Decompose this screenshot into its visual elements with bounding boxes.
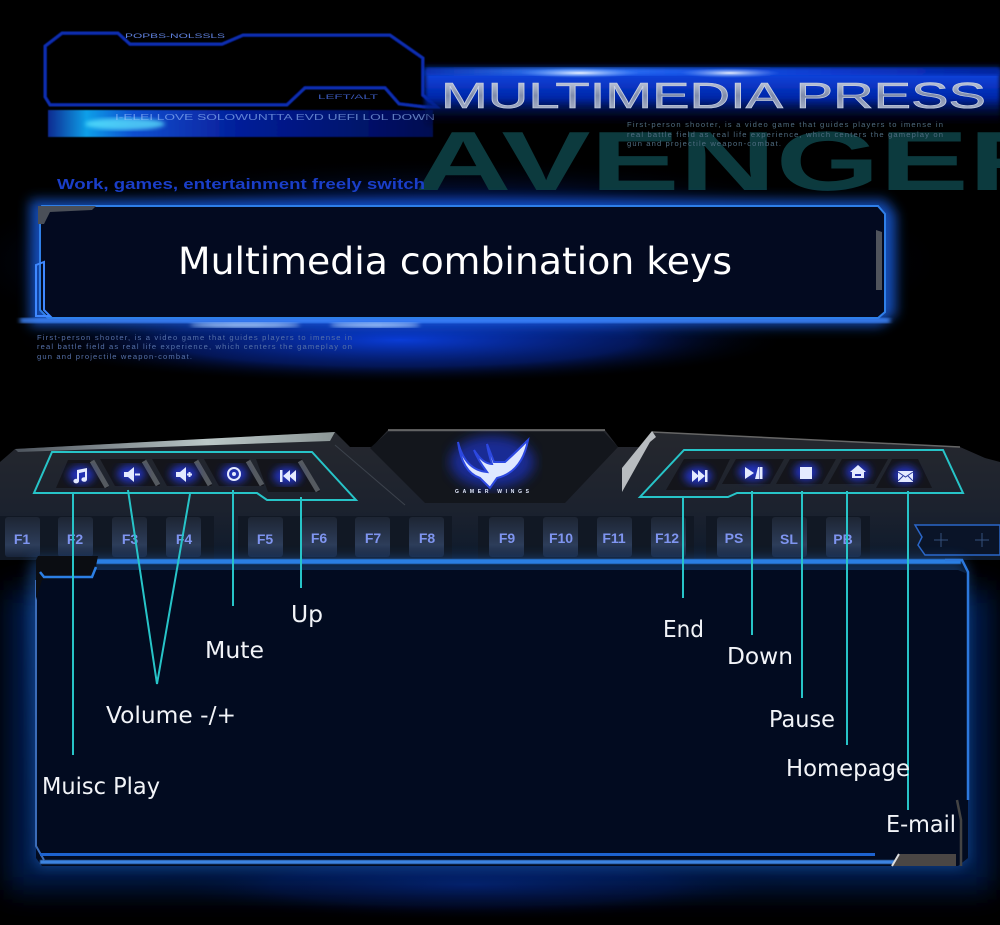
small caption: top right: First-person shooter, is a video game that guides players to imense in — [627, 120, 943, 129]
function key row: F8 — [419, 530, 435, 546]
small caption: top right: real battle field as real life experience, which centers the gameplay on — [627, 130, 943, 139]
small caption: under banner — [37, 333, 352, 361]
key labels: Muisc Play — [42, 774, 160, 800]
function key row: F9 — [499, 530, 515, 546]
key labels: Volume -/+ — [106, 703, 236, 729]
keyboard body — [0, 430, 1000, 560]
small caption: under banner: gun and projectile weapon-combat. — [37, 352, 192, 361]
icon: volume down — [124, 467, 140, 482]
key labels: Homepage — [786, 756, 910, 782]
function key row: F2 — [67, 531, 83, 547]
header frame: LEFT/ALT — [318, 95, 379, 101]
function key row: PB — [833, 531, 853, 547]
key labels: Mute — [205, 638, 264, 664]
icon: home — [850, 465, 866, 478]
icon: stop — [800, 467, 812, 479]
key labels: E-mail — [886, 812, 956, 838]
panel: lower frame — [28, 556, 969, 868]
icon: play pause — [745, 467, 762, 479]
function key row: F11 — [602, 530, 626, 546]
function key row: F5 — [257, 531, 273, 547]
logo emblem: GAMER WINGS — [455, 489, 530, 495]
icon: next track — [692, 470, 708, 482]
header streak: blue light band: I-ELEI LOVE SOLOWUNTTA EVD UEFI LOL DOWN — [115, 113, 435, 122]
background glow: lower panel — [8, 590, 992, 921]
icon: volume up — [176, 467, 192, 482]
function key row: F10 — [549, 530, 573, 546]
function key row: F6 — [311, 530, 327, 546]
small caption: top right: gun and projectile weapon-combat. — [627, 139, 781, 148]
key labels: Pause — [769, 707, 835, 733]
title text: MULTIMEDIA PRESS — [441, 75, 986, 116]
function key row: F4 — [176, 531, 192, 547]
small caption: under banner: real battle field as real life experience, which centers the gameplay on — [37, 342, 352, 351]
subtitle: Work, games, entertainment freely switch — [57, 176, 425, 193]
indicator lights panel — [915, 525, 1000, 555]
left multimedia keys — [56, 459, 320, 492]
icon: previous track — [280, 470, 296, 482]
heading: Multimedia combination keys — [178, 240, 732, 283]
key labels: End — [663, 617, 704, 643]
small caption: top right — [627, 120, 943, 148]
logo emblem — [450, 436, 534, 495]
callout lines — [73, 490, 908, 810]
header frame — [45, 33, 437, 107]
icon: music note — [73, 468, 87, 483]
key labels — [42, 602, 956, 838]
function key row: F12 — [655, 530, 679, 546]
key labels: Down — [727, 644, 793, 670]
function key row: F3 — [122, 531, 138, 547]
callout outline: right keys — [640, 450, 963, 497]
key labels: Up — [291, 602, 323, 628]
function key row: F1 — [14, 531, 30, 547]
function key row: F7 — [365, 530, 381, 546]
function key row — [0, 516, 870, 560]
title band: multimedia press — [425, 62, 1000, 128]
small caption: under banner: First-person shooter, is a video game that guides players to imense in — [37, 333, 352, 342]
background glow: top panel — [0, 157, 950, 384]
icon: mute — [228, 468, 240, 480]
function key row: PS — [725, 530, 743, 546]
function key row: SL — [780, 531, 798, 547]
faded watermark word: AVENGER — [415, 114, 1000, 208]
panel: heading banner — [20, 200, 896, 328]
icon: mail — [898, 471, 913, 482]
header frame: POPBS-NOLSSLS — [125, 34, 225, 40]
header streak: blue light band — [48, 110, 435, 137]
callout outline: left keys — [34, 452, 356, 500]
right multimedia keys — [666, 459, 932, 490]
